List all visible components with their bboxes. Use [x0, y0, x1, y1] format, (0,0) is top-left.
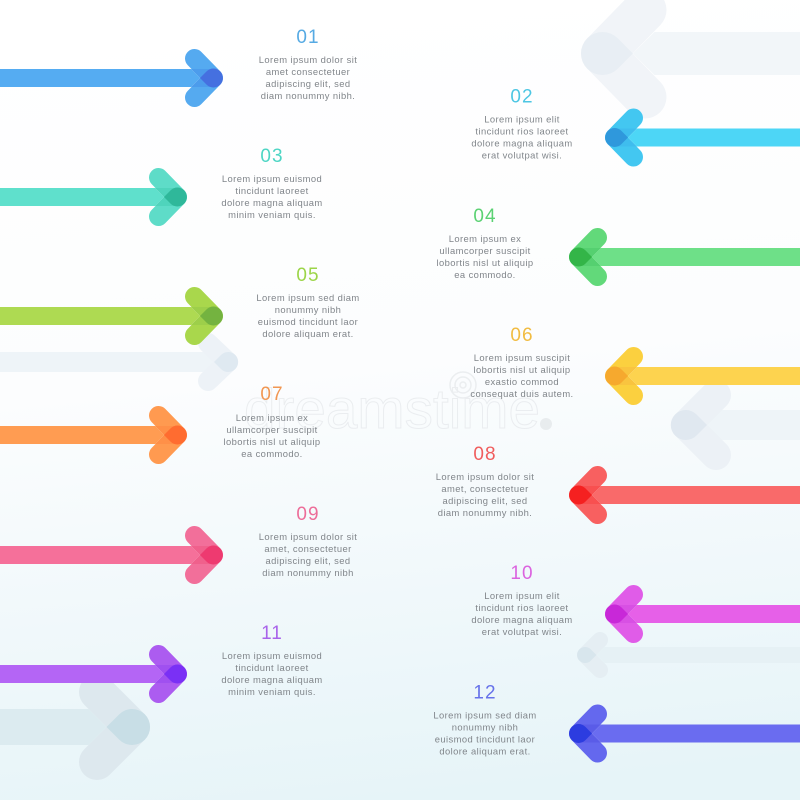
ghost arrow left middle [0, 343, 238, 381]
number 12: 12 [473, 682, 497, 704]
text 09: diam nonummy nibh [262, 567, 354, 578]
text 05: nonummy nibh [275, 304, 341, 315]
arrow 09 [0, 536, 223, 574]
text 05: Lorem ipsum sed diam [256, 292, 360, 303]
arrow 11 [0, 654, 187, 694]
item 09 [0, 504, 357, 578]
number 05: 05 [296, 265, 320, 286]
text 07: ullamcorper suscipit [226, 424, 318, 435]
item 05 [0, 265, 360, 339]
text 04: ullamcorper suscipit [439, 245, 531, 256]
text 06: consequat duis autem. [470, 388, 574, 399]
text 05: euismod tincidunt laor [258, 316, 358, 327]
text 04: lobortis nisl ut aliquip [436, 257, 534, 268]
arrow 01 [0, 58, 223, 98]
text 09: adipiscing elit, sed [265, 555, 351, 566]
number 10: 10 [510, 563, 534, 584]
arrow 12 [569, 714, 800, 753]
item 01 [0, 27, 357, 101]
ghost arrow right lower [577, 640, 800, 670]
arrow 10 [605, 594, 800, 634]
text 02: Lorem ipsum elit [484, 114, 560, 124]
text 11: Lorem ipsum euismod [222, 650, 322, 661]
text 06: lobortis nisl ut aliquip [473, 364, 571, 375]
text 12: dolore aliquam erat. [439, 746, 531, 756]
number 01: 01 [296, 27, 320, 48]
text 12: euismod tincidunt laor [435, 734, 535, 744]
text 10: erat volutpat wisi. [482, 626, 562, 637]
number 07: 07 [260, 384, 284, 405]
item 12 [433, 682, 800, 756]
text 03: dolore magna aliquam [221, 197, 323, 208]
text 04: ea commodo. [454, 269, 516, 280]
text 02: dolore magna aliquam [471, 138, 573, 148]
number 11: 11 [261, 623, 283, 644]
text 03: tincidunt laoreet [235, 185, 309, 196]
arrow 02 [605, 118, 800, 157]
text 07: Lorem ipsum ex [236, 412, 308, 423]
number 02: 02 [510, 86, 534, 108]
text 01: amet consectetuer [266, 66, 350, 77]
text 11: tincidunt laoreet [235, 662, 309, 673]
text 03: Lorem ipsum euismod [222, 173, 322, 184]
text 10: Lorem ipsum elit [484, 590, 560, 601]
item 07 [0, 384, 321, 459]
text 01: diam nonummy nibh. [261, 90, 355, 101]
arrow 07 [0, 416, 187, 454]
text 08: diam nonummy nibh. [438, 507, 532, 518]
text 08: Lorem ipsum dolor sit [436, 471, 534, 482]
text 01: Lorem ipsum dolor sit [259, 54, 357, 65]
number 09: 09 [296, 504, 320, 525]
ghost arrow right middle [671, 395, 800, 455]
text 01: adipiscing elit, sed [265, 78, 351, 89]
item 08 [436, 444, 800, 518]
text 04: Lorem ipsum ex [449, 233, 521, 244]
arrow 04 [569, 238, 800, 276]
text 03: minim veniam quis. [228, 209, 316, 220]
text 08: adipiscing elit, sed [442, 495, 528, 506]
ghost arrow bottom left [0, 692, 150, 762]
watermark: dreamstime [244, 377, 540, 440]
item 10 [471, 563, 800, 637]
text 02: tincidunt rios laoreet [475, 126, 569, 136]
text 11: minim veniam quis. [228, 686, 316, 697]
arrow 05 [0, 296, 223, 336]
item 06 [470, 325, 800, 399]
item 11 [0, 623, 323, 697]
arrow 03 [0, 178, 187, 216]
number 06: 06 [510, 325, 534, 346]
text 12: Lorem ipsum sed diam [433, 710, 537, 720]
item 02 [471, 86, 800, 160]
text 10: tincidunt rios laoreet [475, 602, 569, 613]
text 11: dolore magna aliquam [221, 674, 323, 685]
number 04: 04 [473, 206, 497, 227]
text 02: erat volutpat wisi. [482, 150, 562, 160]
item 04 [436, 206, 800, 280]
number 08: 08 [473, 444, 497, 465]
item 03 [0, 146, 323, 220]
arrow 06 [605, 356, 800, 396]
text 09: Lorem ipsum dolor sit [259, 531, 357, 542]
arrow 08 [569, 476, 800, 514]
text 08: amet, consectetuer [441, 483, 529, 494]
text 07: lobortis nisl ut aliquip [223, 436, 321, 447]
text 12: nonummy nibh [452, 722, 518, 732]
number 03: 03 [260, 146, 284, 167]
text 06: Lorem ipsum suscipit [474, 352, 570, 363]
text 05: dolore aliquam erat. [262, 328, 354, 339]
text 07: ea commodo. [241, 448, 303, 459]
ghost arrow top right [581, 10, 800, 97]
text 09: amet, consectetuer [264, 543, 352, 554]
text 10: dolore magna aliquam [471, 614, 573, 625]
text 06: exastio commod [485, 376, 559, 387]
